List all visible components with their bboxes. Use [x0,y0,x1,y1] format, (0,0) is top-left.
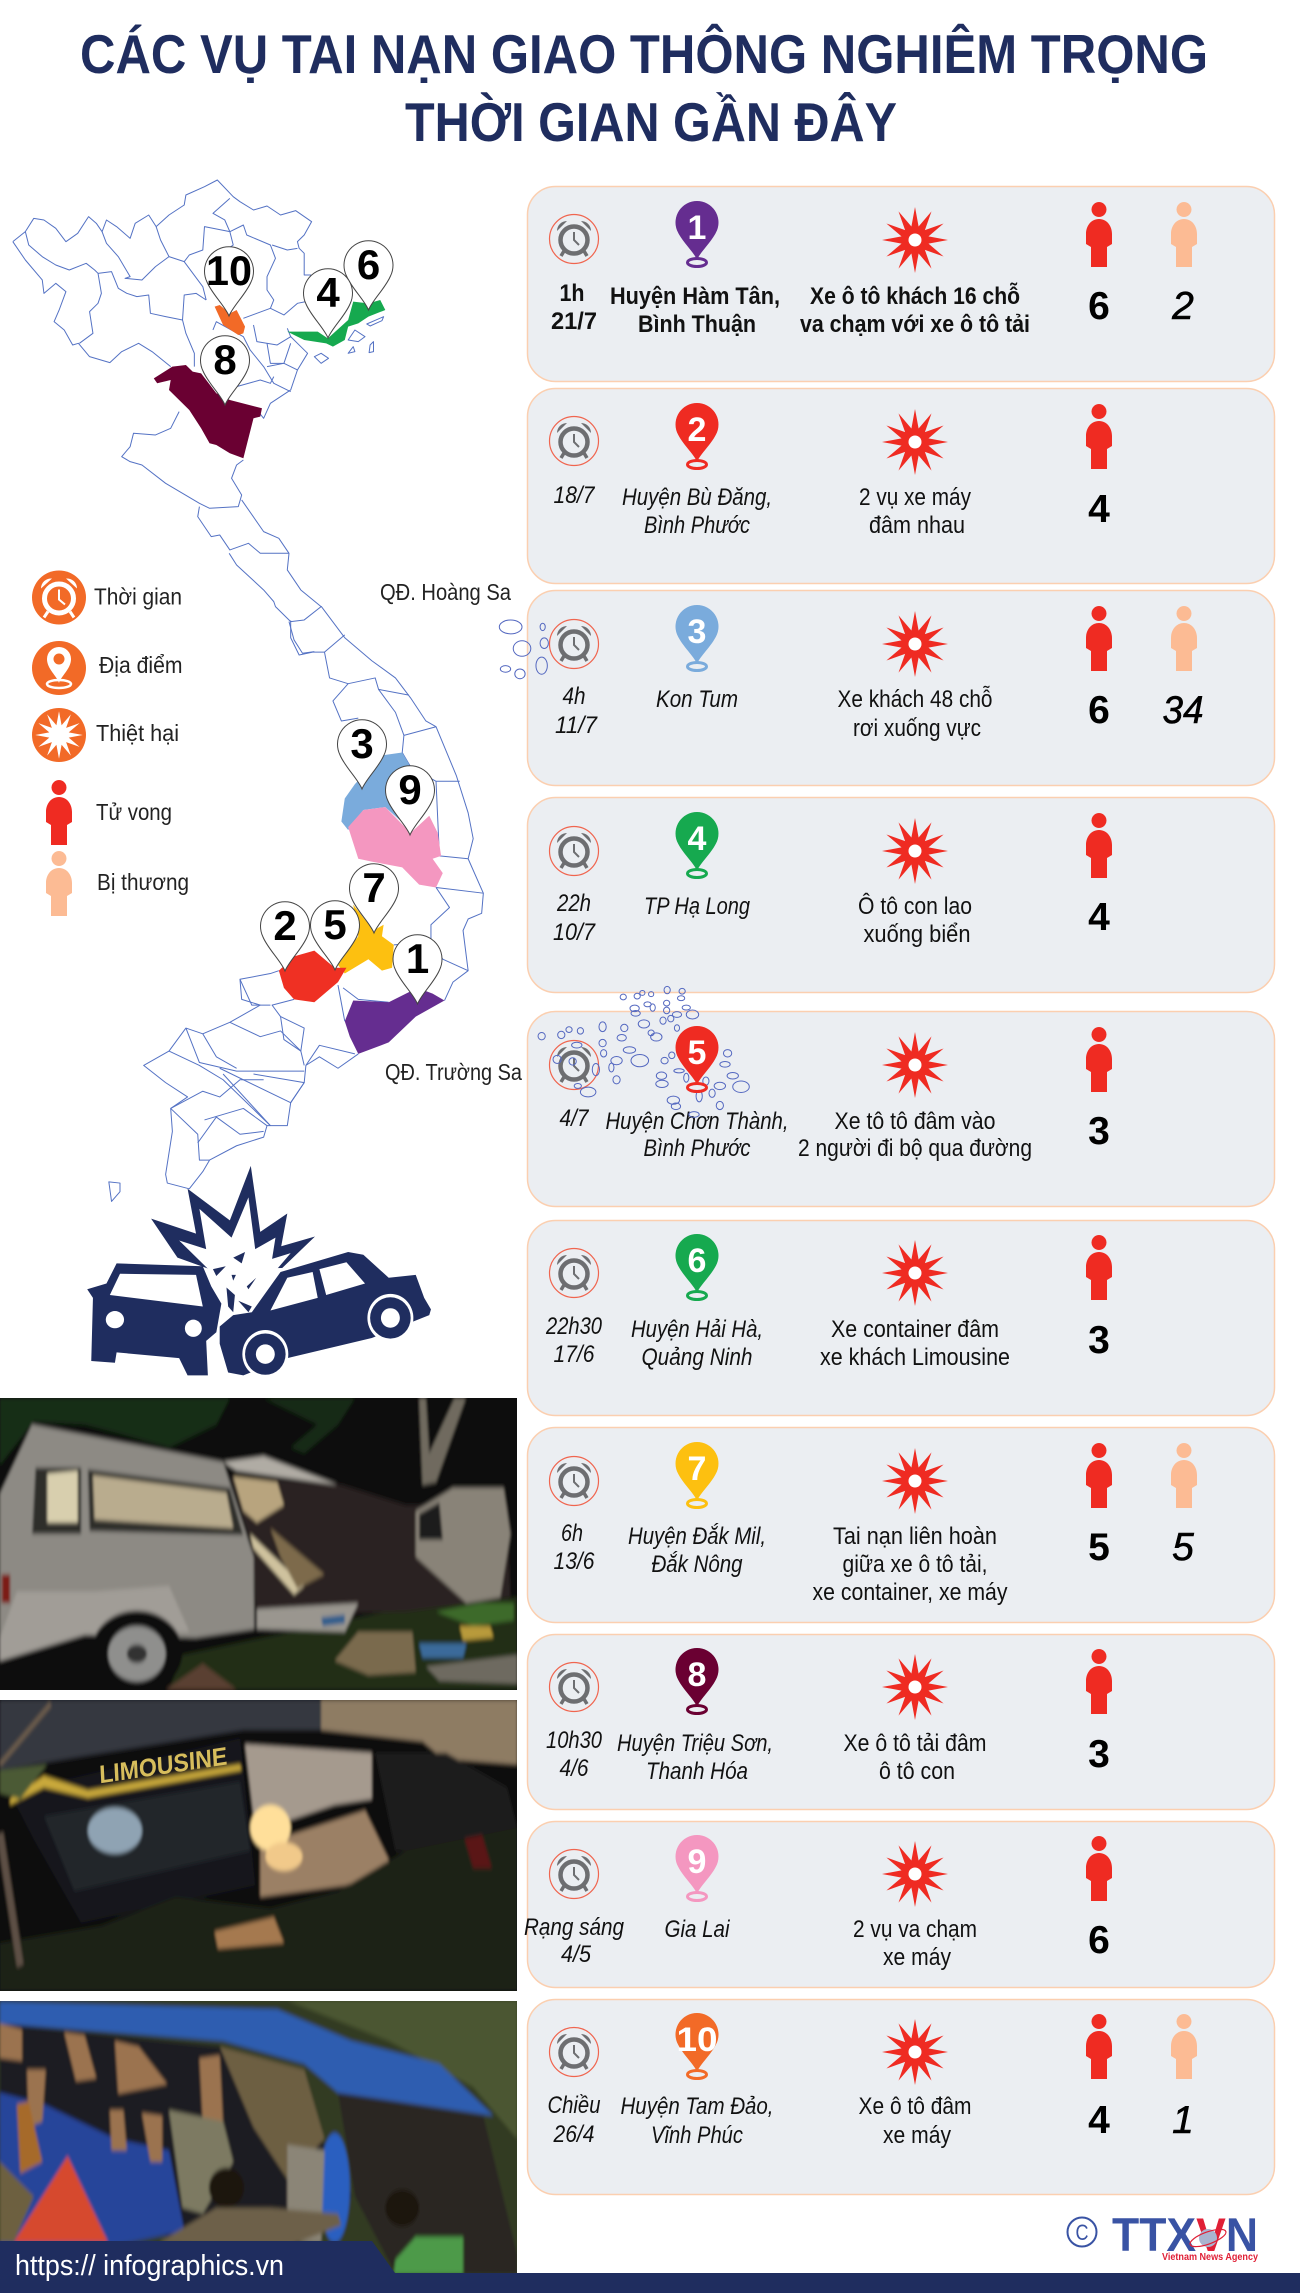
damage text: ô tô con [879,1758,955,1785]
deaths icon [1086,1649,1112,1714]
islands: Hoàng Sa [499,620,548,679]
deaths number: 3 [1088,1733,1110,1776]
deaths number: 6 [1088,1919,1110,1962]
map pin 10: 10 [206,247,252,294]
injured number: 34 [1162,689,1204,732]
damage text: xuống biển [864,921,970,948]
map: northern provinces [13,180,385,653]
map pin 5: 5 [323,901,347,948]
location pin 9: 9 [688,1843,706,1881]
wordmark: TTXVN [1112,2208,1258,2261]
province fill: Quảng Ninh [287,300,385,347]
time [555,683,599,739]
time: 22h [556,890,591,917]
damage text: 2 vụ xe máy [859,484,971,511]
damage text: Xe ô tô khách 16 chỗ [810,282,1020,310]
damage text: Ô tô con lao [858,892,972,920]
location pin 3 [676,605,718,670]
damage text: Xe ô tô đâm [858,2093,972,2120]
clock icon [550,1662,598,1712]
location pin 4 [676,812,718,878]
clock icon [550,1850,598,1898]
damage text [800,282,1030,338]
time: 1h [560,280,584,307]
location: TP Hạ Long [644,893,751,920]
title [80,23,1208,153]
map: central and southern provinces [109,606,483,1201]
legend icon: place [32,641,86,695]
location: Quảng Ninh [642,1344,752,1371]
damage text: 2 vụ va chạm [853,1916,977,1943]
deaths number: 4 [1088,488,1110,531]
time: 21/7 [551,308,597,335]
damage text [798,1108,1032,1162]
damage text: xe máy [883,2122,951,2149]
label: QĐ. Hoàng Sa: QĐ. Hoàng Sa [380,579,511,605]
time [546,1727,603,1782]
time [551,280,597,335]
time: 22h30 [545,1313,603,1340]
injured number: 2 [1171,285,1194,328]
location [620,2093,774,2149]
time: Chiều [548,2092,600,2119]
photo: Limousine bus accident [0,1700,517,1991]
location: Huyện Đắk Mil, [628,1523,766,1550]
damage text: đâm nhau [869,512,965,539]
location [617,1730,773,1785]
damage text: Xe container đâm [831,1316,999,1343]
photo: wrecked silver van [0,1398,517,1690]
map pin 3: 3 [350,720,374,767]
damage star [882,818,948,884]
time: 10/7 [553,919,596,946]
time: 11/7 [555,712,599,739]
location pin 7: 7 [688,1450,706,1488]
province fill: Thanh Hóa [154,365,262,458]
location pin 9 [676,1835,718,1900]
location pin 10: 10 [676,2021,718,2059]
province fill: Gia Lai [348,807,443,887]
deaths number: 5 [1088,1526,1110,1569]
time [545,1313,603,1368]
location: Huyện Chơn Thành, [606,1108,788,1135]
injured icon [1171,2014,1197,2079]
footer band [0,2241,1300,2293]
panel: accident 7 [528,1428,1274,1622]
map pins [200,241,442,1004]
legend icon: time [32,570,86,624]
damage text: rơi xuống vực [853,715,981,742]
map pin 9: 9 [398,766,422,813]
location pin 10 [676,2013,718,2078]
location pin 6 [676,1234,718,1300]
location: Bình Phước [644,1135,750,1162]
panel: accident 6 [528,1220,1274,1416]
location pin 2: 2 [688,411,706,449]
damage text: 2 người đi bộ qua đường [798,1135,1032,1162]
time: 4/6 [560,1755,589,1782]
location: Huyện Triệu Sơn, [617,1730,773,1757]
province fill: Kon Tum [341,753,411,830]
map pin 9 [386,766,434,835]
clock icon [550,416,598,466]
time [524,1914,625,1968]
clock icon [550,620,598,668]
damage star [882,1841,948,1907]
map pin 2: 2 [273,902,297,949]
location pin for accident 5 [676,1026,718,1092]
damage text [838,686,992,742]
time [548,2092,600,2148]
location: Bình Phước [644,512,750,539]
time: 4/7 [560,1105,590,1132]
location: Huyện Bù Đăng, [622,484,772,511]
deaths icon [1086,1235,1112,1300]
label: QĐ. Trường Sa: QĐ. Trường Sa [385,1059,522,1085]
location pin 1: 1 [688,209,706,247]
province fill: Vĩnh Phúc [215,305,245,335]
deaths icon [1086,2014,1112,2079]
damage text: Xe tô tô đâm vào [834,1108,996,1135]
logo: TTXVN [1068,2208,1258,2263]
panel: accident 3 [528,590,1274,786]
map pin 6: 6 [357,241,380,288]
location: Vĩnh Phúc [651,2122,743,2149]
location pin 2 [676,403,718,468]
damage text [859,484,971,539]
deaths icon [1086,606,1112,671]
deaths icon [1086,813,1112,878]
map pin 6 [344,241,393,310]
legend [32,570,189,916]
panel: accident 9 [524,1822,1274,1988]
damage text: Tai nạn liên hoàn [833,1523,997,1550]
time [554,1520,595,1575]
deaths number: 3 [1088,1110,1110,1153]
damage text: Xe ô tô tải đâm [844,1730,986,1757]
time: 4/5 [561,1941,592,1968]
deaths icon [1086,1443,1112,1508]
damage text: xe máy [883,1944,951,1971]
time: 18/7 [554,482,596,509]
title: THỜI GIAN GẦN ĐÂY [405,91,897,153]
panel: accident 4 [528,798,1274,992]
location: Đắk Nông [652,1551,743,1578]
damage text [858,892,972,948]
panel: accident 1 [528,186,1274,382]
copyright mark: C [1076,2220,1089,2245]
time: Rạng sáng [524,1914,625,1941]
location pin 1 [676,201,718,266]
damage star [882,1448,948,1514]
damage text [820,1316,1010,1371]
location [631,1316,763,1371]
location pin 7 [676,1442,718,1508]
clock icon [550,214,598,264]
map pin 5 [310,901,360,970]
damage star [882,1240,948,1306]
damage star [882,409,948,475]
deaths number: 6 [1088,689,1110,732]
location pin 8: 8 [688,1656,706,1694]
location pin 8 [676,1648,718,1714]
legend text: place: Địa điểm [99,652,182,678]
time: 10h30 [546,1727,603,1754]
map pin 1: 1 [406,935,429,982]
clock icon [550,826,598,876]
location pin 4: 4 [688,820,707,858]
location: Huyện Hải Hà, [631,1316,763,1343]
damage text: xe khách Limousine [820,1344,1010,1371]
time: 4h [562,683,586,710]
injured number: 1 [1172,2099,1194,2142]
panel: accident 10 [528,2000,1274,2194]
map pin 2 [260,902,310,971]
photo: blue bus accident [0,2001,517,2273]
map pin 8: 8 [213,336,237,383]
damage star [882,1032,948,1098]
damage text: va chạm với xe ô tô tải [800,311,1030,338]
location: Kon Tum [656,686,738,713]
time [553,890,596,946]
map pin 7: 7 [362,864,386,911]
deaths number: 4 [1088,896,1110,939]
copyright mark [1068,2218,1096,2246]
damage text [812,1523,1008,1606]
legend icon: damage [32,708,86,762]
damage star [882,2019,948,2085]
legend text: injured: Bị thương [97,869,189,895]
location [622,484,772,539]
deaths number: 4 [1088,2099,1110,2142]
time: 17/6 [554,1341,595,1368]
damage text [844,1730,986,1785]
injured number: 5 [1172,1526,1194,1569]
map pin 10 [204,247,254,316]
location pin for accident 5: 5 [688,1034,706,1072]
deaths icon [1086,1027,1112,1092]
location: Bình Thuận [638,311,756,338]
injured icon [1171,606,1197,671]
deaths number: 3 [1088,1319,1110,1362]
damage text [853,1916,977,1971]
map pin 7 [350,864,398,933]
location: Huyện Tam Đảo, [620,2093,774,2120]
panel: accident 2 [528,388,1274,584]
map pin 3 [338,720,386,789]
time: 6h [561,1520,583,1547]
map pin 4 [304,269,352,338]
icon: car crash [87,1166,431,1378]
deaths number: 6 [1088,285,1110,328]
deaths icon [1086,202,1112,267]
map pin 4: 4 [316,269,340,316]
province fill: Bình Phước [279,951,346,1002]
panel: accident 5 [528,1012,1274,1206]
damage star [882,207,948,273]
legend text: damage: Thiệt hại [96,720,179,746]
damage star [882,611,948,677]
deaths icon [1086,404,1112,469]
islands: Trường Sa [538,986,749,1117]
damage text: Xe khách 48 chỗ [838,686,992,713]
province fill: Bình Thuận [345,988,444,1054]
damage text: xe container, xe máy [812,1579,1008,1606]
map pin 1 [393,935,442,1004]
deaths icon [1086,1836,1112,1901]
legend text: deaths: Tử vong [96,799,172,825]
location pin 6: 6 [688,1242,706,1280]
map pin 8 [200,336,250,405]
location: Thanh Hóa [646,1758,748,1785]
legend text: time: Thời gian [94,584,182,610]
location: Gia Lai [664,1916,730,1943]
clock icon [550,1456,598,1506]
location pin 3: 3 [688,613,706,651]
damage text: giữa xe ô tô tải, [842,1551,988,1578]
location [606,1108,788,1162]
clock icon [550,1040,598,1090]
globe [1188,2226,1228,2250]
clock icon [550,2028,598,2076]
legend icon: deaths [46,780,72,845]
location [628,1523,766,1578]
legend icon: injured [46,851,72,916]
province fill: Đắk Nông [338,905,394,974]
time: 26/4 [553,2121,594,2148]
location [610,283,780,338]
injured icon [1171,202,1197,267]
location: Huyện Hàm Tân, [610,283,780,310]
time: 13/6 [554,1548,595,1575]
injured icon [1171,1443,1197,1508]
footer url: https:// infographics.vn [15,2250,284,2282]
damage star [882,1654,948,1720]
panel: accident 8 [528,1634,1274,1810]
tagline: Vietnam News Agency [1162,2252,1258,2263]
clock icon [550,1248,598,1298]
photo text: Limousine: LIMOUSINE [99,1742,228,1789]
damage text [858,2093,972,2149]
